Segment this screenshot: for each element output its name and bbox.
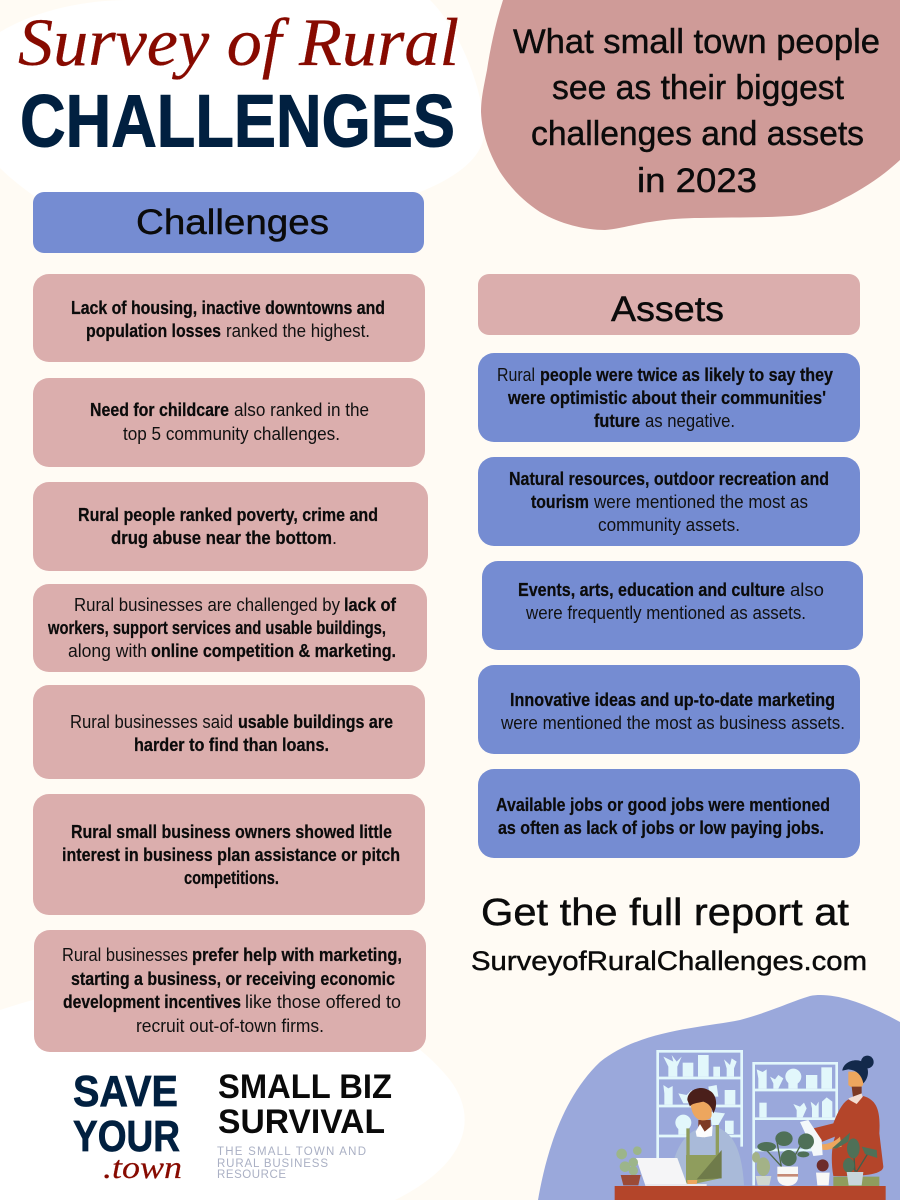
man (670, 1088, 744, 1185)
challenge card: preferred help: starting a business, or receiving economic (71, 969, 395, 989)
white blob behind title (0, 0, 484, 200)
asset card: events and culture: also (790, 580, 824, 600)
challenge card: housing: population losses (86, 321, 221, 341)
logo: Save Your Town: .town (103, 1149, 182, 1185)
asset card: natural resources (478, 457, 860, 546)
subtitle: see as their biggest (552, 69, 845, 107)
asset card: innovative ideas (478, 665, 860, 754)
challenge card: usable buildings: usable buildings are (238, 712, 393, 732)
call to action: SurveyofRuralChallenges.com (471, 946, 867, 976)
challenge card: business plan (33, 794, 425, 915)
challenge card: preferred help: development incentives (63, 992, 241, 1012)
asset card: jobs: as often as lack of jobs or low paying jobs. (498, 818, 824, 838)
challenge card: housing: Lack of housing, inactive downtowns and (71, 298, 385, 318)
challenge card: preferred help: recruit out-of-town firms. (136, 1016, 324, 1036)
challenge card: business challenges (33, 584, 427, 672)
subtitle: What small town people (513, 23, 880, 61)
panel: challenges heading (33, 192, 424, 253)
challenge card: business plan: competitions. (184, 868, 279, 888)
logo: Small Biz Survival (217, 1068, 392, 1181)
challenge card: preferred help: Rural businesses (62, 945, 188, 965)
asset card: jobs (478, 769, 860, 858)
logo: Save Your Town (73, 1067, 182, 1185)
purple blob behind illustration (538, 995, 900, 1200)
asset card: jobs: Available jobs or good jobs were mentioned (496, 795, 830, 815)
challenge card: usable buildings: harder to find than loans. (134, 735, 329, 755)
challenge card: childcare (33, 378, 425, 467)
logo: Small Biz Survival: RURAL BUSINESS (217, 1158, 328, 1170)
asset card: natural resources: were mentioned the most as (593, 492, 808, 512)
challenge card: childcare: top 5 community challenges. (123, 424, 340, 444)
left shelf (658, 1051, 742, 1187)
call to action: Get the full report at (481, 892, 849, 934)
right shelf (754, 1063, 837, 1185)
title: CHALLENGES (20, 80, 455, 162)
challenge card: poverty: Rural people ranked poverty, crime and (78, 505, 378, 525)
challenge card: usable buildings: Rural businesses said (70, 712, 233, 732)
panel: challenges heading: Challenges (136, 203, 329, 242)
challenge card: housing (33, 274, 425, 362)
left shelf plants (663, 1055, 737, 1135)
logo: Small Biz Survival: SMALL BIZ (218, 1068, 392, 1106)
asset card: natural resources: community assets. (598, 515, 740, 535)
title (18, 4, 459, 162)
challenge card: business challenges: along with (68, 641, 147, 661)
subtitle: challenges and assets (531, 115, 864, 153)
challenge card: childcare: Need for childcare (90, 400, 229, 420)
potted plants (616, 1131, 877, 1186)
panel: assets heading (478, 274, 860, 335)
challenge card: childcare: also ranked in the (234, 400, 369, 420)
challenge card: poverty (33, 482, 428, 571)
asset card: innovative ideas: were mentioned the most as business assets. (500, 713, 845, 733)
woman (800, 1056, 883, 1186)
challenge card: usable buildings (33, 685, 425, 779)
asset card: optimism: Rural (497, 365, 535, 385)
challenge card: preferred help: like those offered to (245, 992, 401, 1012)
challenge card: business challenges: online competition & marketing. (151, 641, 396, 661)
asset card: optimism: people were twice as likely to say they (540, 365, 833, 385)
illustration: plant shop workers (615, 1051, 886, 1200)
challenge card: business challenges: Rural businesses are challenged by (74, 595, 340, 615)
asset card: natural resources: Natural resources, outdoor recreation and (509, 469, 829, 489)
challenge card: business challenges: workers, support services and usable buildings, (47, 618, 386, 638)
asset card: events and culture (482, 561, 863, 650)
asset card: events and culture: were frequently mentioned as assets. (525, 603, 806, 623)
logo: Save Your Town: SAVE (73, 1067, 178, 1116)
asset card: optimism: future (594, 411, 640, 431)
logo: Save Your Town: YOUR (73, 1112, 180, 1161)
counter (615, 1186, 886, 1200)
challenge card: poverty: . (332, 528, 337, 548)
logo: Small Biz Survival: THE SMALL TOWN AND (217, 1146, 366, 1158)
asset card: innovative ideas: Innovative ideas and up-to-date marketing (510, 690, 835, 710)
pink blob behind subtitle (481, 0, 900, 230)
asset card: optimism: were optimistic about their communities' (507, 388, 826, 408)
challenge card: business challenges: lack of (344, 595, 397, 615)
asset card: events and culture: Events, arts, education and culture (518, 580, 785, 600)
logo: Small Biz Survival: RESOURCE (217, 1169, 286, 1181)
white blob behind logos (0, 979, 465, 1200)
challenge card: preferred help (34, 930, 426, 1052)
asset card: natural resources: tourism (531, 492, 589, 512)
asset card: optimism: as negative. (645, 411, 735, 431)
subtitle (513, 23, 880, 200)
challenge card: housing: ranked the highest. (226, 321, 370, 341)
logo: Small Biz Survival: SURVIVAL (218, 1103, 385, 1141)
laptop (636, 1158, 707, 1186)
challenge card: business plan: interest in business plan assistance or pitch (62, 845, 400, 865)
call to action (471, 892, 867, 976)
asset card: optimism (478, 353, 860, 442)
challenge card: business plan: Rural small business owners showed little (71, 822, 392, 842)
title: Survey of Rural (18, 4, 459, 80)
right shelf plants (757, 1067, 832, 1117)
subtitle: in 2023 (637, 162, 757, 200)
challenge card: poverty: drug abuse near the bottom (111, 528, 332, 548)
challenge card: preferred help: prefer help with marketing, (192, 945, 402, 965)
panel: assets heading: Assets (611, 290, 724, 329)
